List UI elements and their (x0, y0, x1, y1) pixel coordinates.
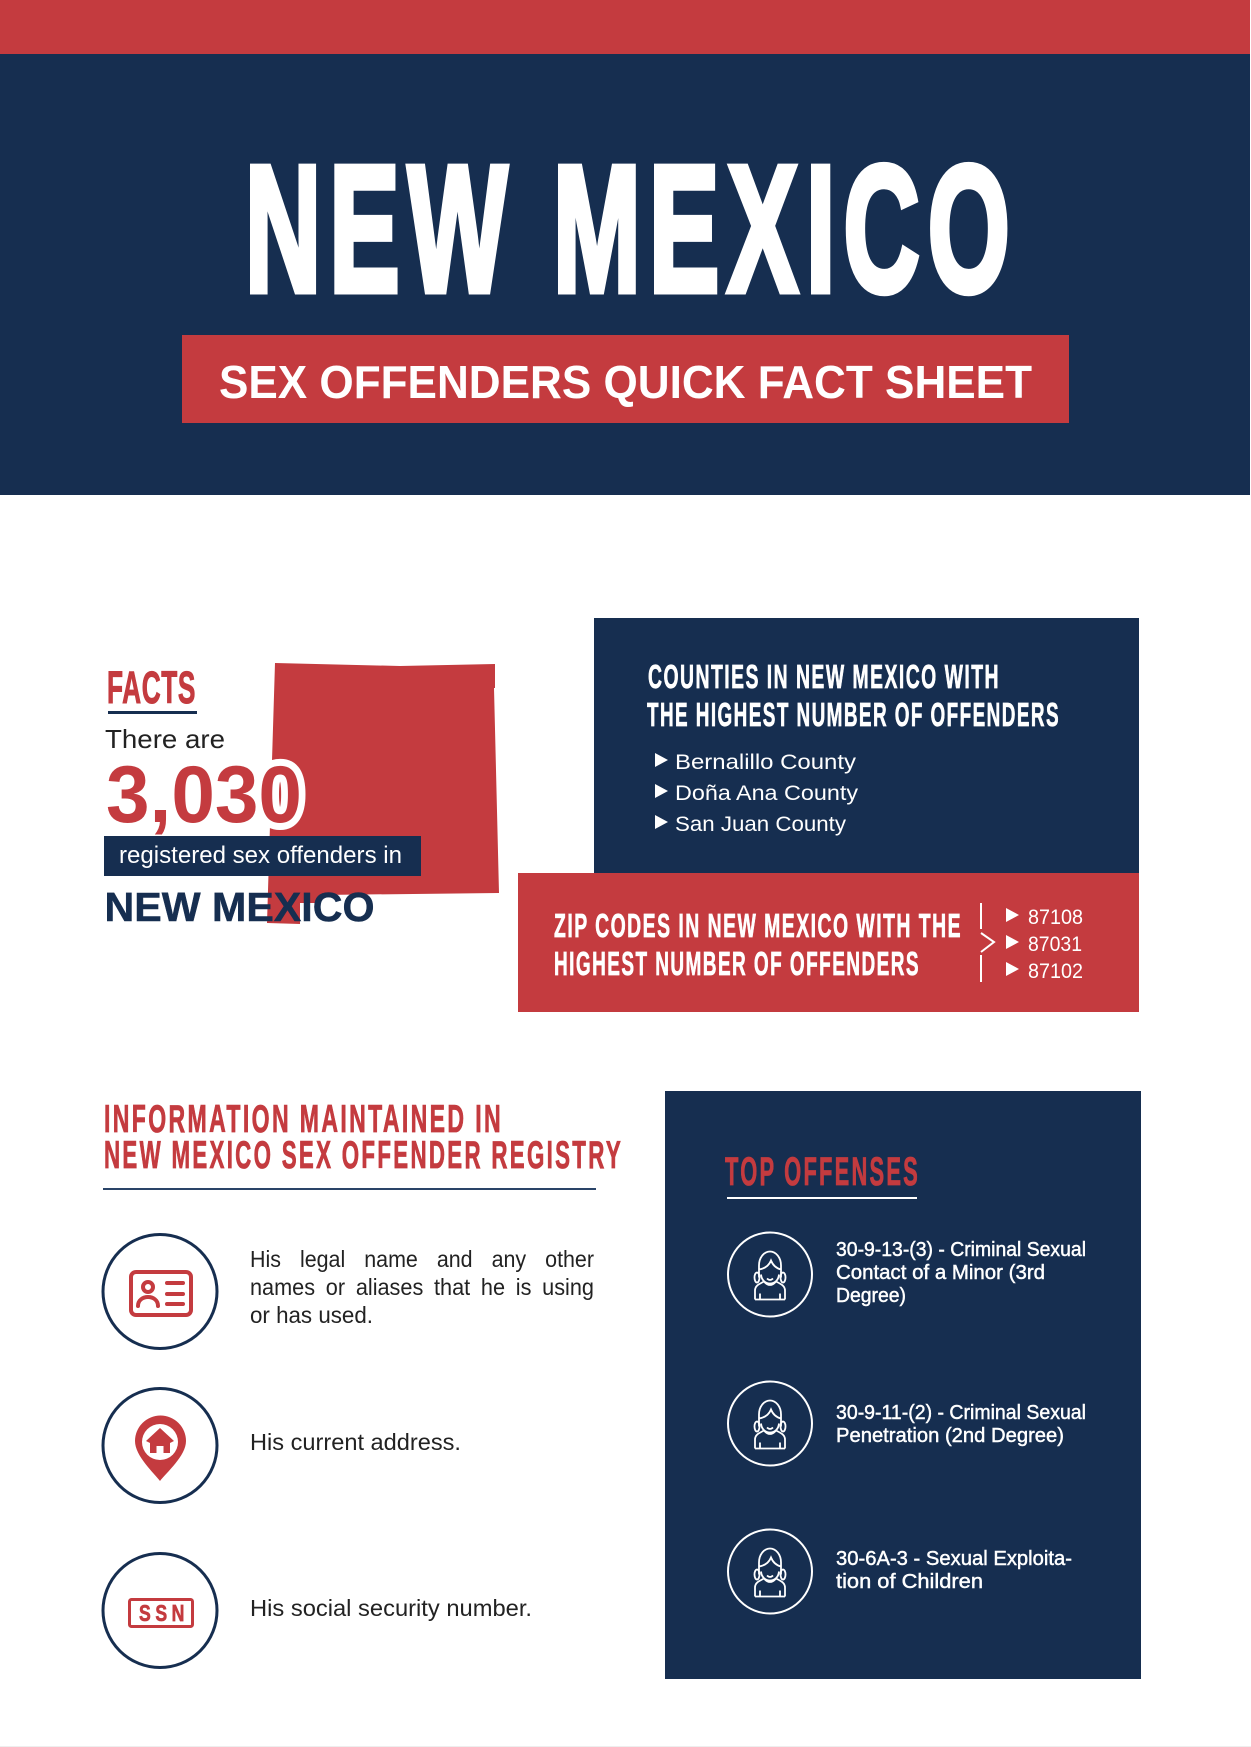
offense 1 text (836, 1238, 1086, 1307)
offenses rule (727, 1197, 917, 1199)
county list: Bernalillo County (675, 750, 856, 774)
bracket arrow (981, 903, 994, 982)
icon: location pin (103, 1388, 217, 1502)
icon: girl 2 (728, 1382, 812, 1466)
registered banner (104, 836, 421, 876)
offenses heading: TOP OFFENSES (725, 1150, 920, 1194)
registry rule (103, 1188, 596, 1190)
subtitle banner (182, 335, 1069, 423)
offense 1 text: 30-9-13-(3) - Criminal Sexual (836, 1238, 1086, 1261)
map of New Mexico (267, 663, 499, 924)
zip heading: HIGHEST NUMBER OF OFFENDERS (554, 945, 920, 982)
zip list: 87108 (1028, 905, 1083, 929)
text: legal name: His legal name and any other (250, 1246, 594, 1272)
facts underline (108, 711, 197, 714)
icon: ssn: SSN (139, 1600, 189, 1626)
county list: Doña Ana County (675, 781, 858, 805)
registry heading (104, 1098, 623, 1177)
registry heading: NEW MEXICO SEX OFFENDER REGISTRY (104, 1134, 623, 1177)
offense 2 text (836, 1401, 1086, 1447)
text: address: His current address. (250, 1429, 461, 1455)
icon: ssn (103, 1554, 217, 1668)
offense 3 text: tion of Children (836, 1570, 983, 1593)
offense 2 text: Penetration (2nd Degree) (836, 1424, 1064, 1447)
icon: girl 3 (728, 1530, 812, 1614)
top red band (0, 0, 1250, 54)
panel: facts (104, 662, 499, 930)
county list: San Juan County (675, 812, 846, 836)
zip list: 87102 (1028, 959, 1083, 983)
offense 3 text (836, 1547, 1072, 1593)
county list (655, 750, 858, 836)
icon: girl 1 (728, 1232, 812, 1316)
subtitle banner: SEX OFFENDERS QUICK FACT SHEET (219, 356, 1032, 408)
panel: counties (594, 618, 1139, 873)
zip heading: ZIP CODES IN NEW MEXICO WITH THE (554, 907, 962, 944)
facts heading: FACTS (107, 662, 196, 713)
offense 1 text: Contact of a Minor (3rd (836, 1261, 1045, 1284)
panel: top offenses (665, 1091, 1141, 1679)
text: social security: His social security number. (250, 1595, 532, 1621)
icon: id card (103, 1234, 217, 1348)
text: legal name (250, 1246, 594, 1328)
counties heading (647, 658, 1060, 733)
offense 3 text: 30-6A-3 - Sexual Exploita- (836, 1547, 1072, 1570)
panel: header (0, 0, 1250, 495)
offense 2 text: 30-9-11-(2) - Criminal Sexual (836, 1401, 1086, 1424)
offender count: 3,030 (106, 750, 302, 840)
text: legal name: names or aliases that he is using (250, 1274, 594, 1300)
offense 1 text: Degree) (836, 1284, 906, 1307)
zip list: 87031 (1028, 932, 1082, 956)
zip heading (554, 907, 962, 982)
there are: There are (105, 724, 225, 754)
panel: zip codes (518, 873, 1139, 1012)
zip list (1006, 905, 1083, 983)
counties heading: COUNTIES IN NEW MEXICO WITH (648, 658, 1000, 695)
panel: registry information (103, 1098, 623, 1668)
registered banner: registered sex offenders in (119, 842, 402, 869)
registry heading: INFORMATION MAINTAINED IN (104, 1098, 503, 1141)
text: legal name: or has used. (250, 1302, 373, 1328)
state name: NEW MEXICO (104, 884, 374, 930)
